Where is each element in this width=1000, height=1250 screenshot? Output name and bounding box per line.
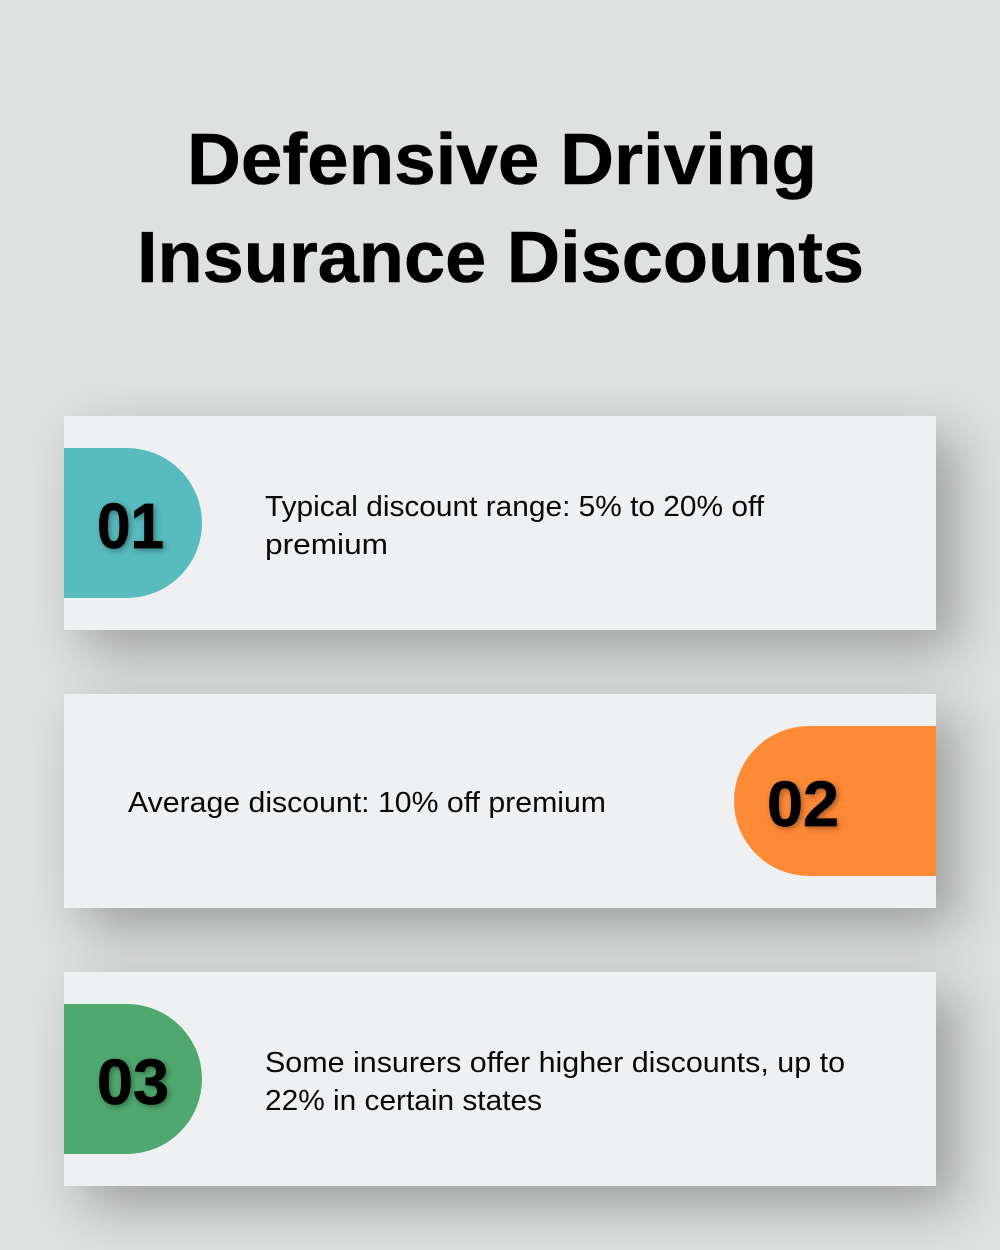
text: some insurers offer higher discounts: Some insurers offer higher discounts, up to [265, 1047, 845, 1079]
text: some insurers offer higher discounts [265, 1047, 845, 1117]
panel: higher discounts [64, 972, 936, 1186]
title: Insurance Discounts [137, 218, 864, 298]
badge: 01 [64, 448, 202, 598]
panel: average discount [64, 694, 936, 908]
text: typical discount range: premium [265, 529, 388, 561]
text: average discount: Average discount: 10% off premium [128, 787, 606, 819]
title: Defensive Driving [187, 120, 817, 200]
number 03: 03 [97, 1046, 169, 1118]
text: typical discount range: Typical discount range: 5% to 20% off [265, 491, 765, 523]
panel: discount range [64, 416, 936, 630]
text: typical discount range [265, 491, 765, 561]
text: some insurers offer higher discounts: 22% in certain states [265, 1085, 542, 1117]
number 02: 02 [767, 768, 839, 840]
number 01: 01 [97, 490, 164, 562]
badge: 02 [734, 726, 936, 876]
badge: 03 [64, 1004, 202, 1154]
title [137, 120, 864, 298]
